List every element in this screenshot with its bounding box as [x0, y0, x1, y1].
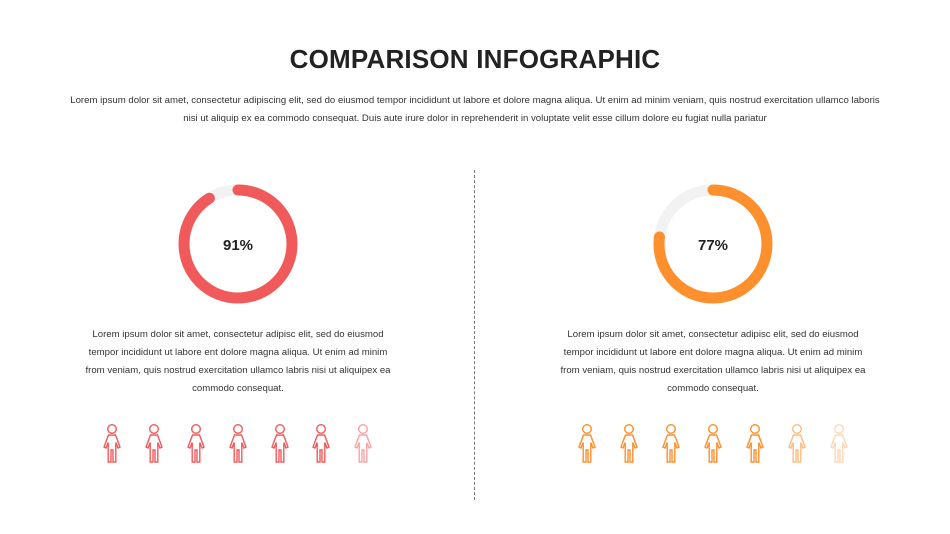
- intro text: Lorem ipsum dolor sit amet, consectetur adipiscing elit, sed do eiusmod tempor incididunt ut labore et dolore magna aliqua. Ut enim ad minim veniam, quis nostrud exercitation ullamco laboris: [70, 95, 880, 106]
- text: left description: [85, 329, 390, 394]
- title: COMPARISON INFOGRAPHIC: [290, 44, 660, 74]
- panel: right: [654, 184, 772, 304]
- text: right description: commodo consequat.: [667, 383, 759, 394]
- text: left description: tempor incididunt ut labore ent dolore magna aliqua. Ut enim ad minim: [89, 347, 387, 358]
- text: right description: from veniam, quis nostrud exercitation ullamco labris nisi ut aliquipex ea: [560, 365, 866, 376]
- donut chart 91%: 91%: [223, 237, 253, 254]
- text: left description: commodo consequat.: [192, 383, 284, 394]
- text: right description: tempor incididunt ut labore ent dolore magna aliqua. Ut enim ad minim: [564, 347, 862, 358]
- donut chart 77%: 77%: [698, 237, 728, 254]
- donut chart 91%: [178, 184, 298, 304]
- text: left description: from veniam, quis nostrud exercitation ullamco labris nisi ut aliquipex ea: [85, 365, 390, 376]
- text: right description: Lorem ipsum dolor sit amet, consectetur adipisc elit, sed do eiusmod: [567, 329, 859, 340]
- panel: left: [178, 184, 298, 304]
- icons: people rows: [103, 424, 848, 463]
- donut chart 77%: [654, 184, 772, 304]
- divider: [474, 170, 475, 500]
- intro text: [70, 95, 880, 124]
- text: right description: [560, 329, 866, 394]
- intro text: nisi ut aliquip ex ea commodo consequat. Duis aute irure dolor in reprehenderit in voluptate velit esse cillum dolore eu fugiat nulla pariatur: [183, 113, 767, 124]
- text: left description: Lorem ipsum dolor sit amet, consectetur adipisc elit, sed do eiusmod: [92, 329, 384, 340]
